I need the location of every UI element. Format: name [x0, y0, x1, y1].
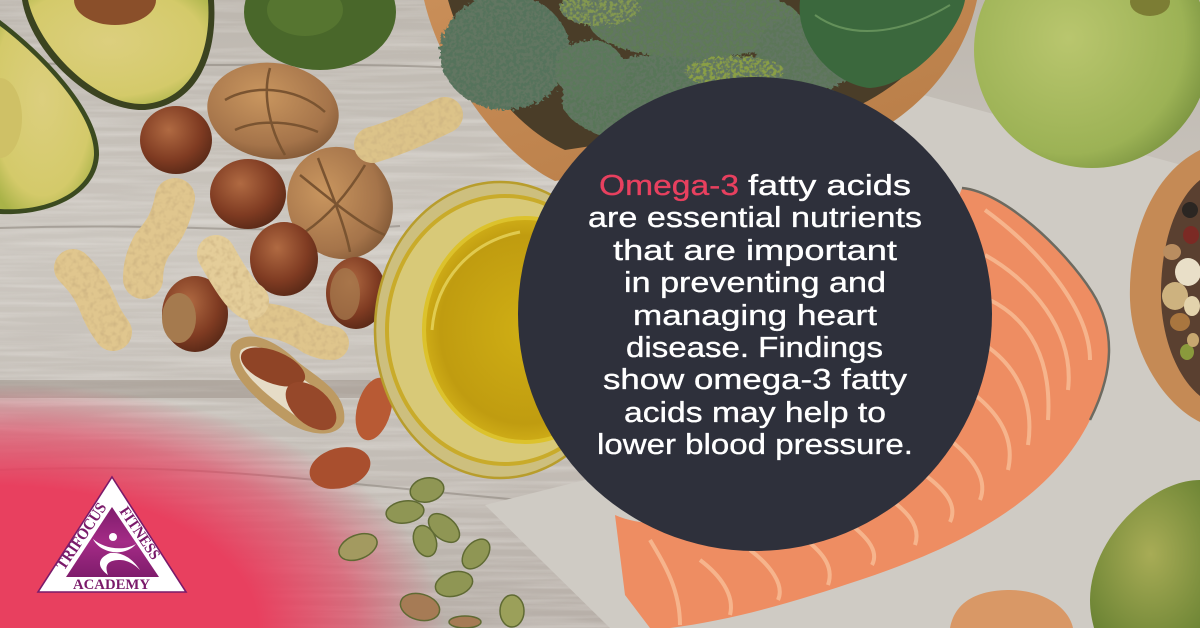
whole avocado: [244, 0, 396, 70]
omega-3 text block: in preventing and: [624, 267, 886, 299]
peanuts: [73, 115, 445, 343]
background: paper sheet: [485, 90, 1200, 628]
logo: Trifocus Fitness Academy: TRIFOCUS: [53, 500, 110, 573]
wooden bowl of greens: [424, 0, 977, 181]
walnuts: [201, 54, 411, 277]
omega-3 text block: disease. Findings: [626, 332, 883, 364]
dark circle panel: [518, 77, 992, 551]
omega-3 text block: that are important: [613, 235, 897, 267]
omega-3 text block: fatty acids: [748, 170, 911, 202]
hazelnuts: [140, 106, 386, 352]
green apple: [974, 0, 1200, 168]
salmon steak: [615, 188, 1109, 628]
omega-3 text block: [588, 170, 922, 461]
omega-3 text block: lower blood pressure.: [597, 429, 913, 461]
glass bowl of olive oil: [375, 182, 626, 478]
omega-3 text block: managing heart: [633, 300, 877, 332]
broccoli: [440, 0, 855, 146]
egg: [950, 590, 1073, 628]
logo: Trifocus Fitness Academy: ACADEMY: [73, 577, 150, 593]
pear: [1090, 480, 1200, 628]
wooden bowl of beans: [1130, 150, 1200, 422]
almonds: [305, 374, 399, 495]
pumpkin seeds: [335, 475, 524, 628]
avocado half top: [22, 0, 214, 110]
omega-3 text block: show omega-3 fatty: [603, 364, 908, 396]
omega-3 text block: acids may help to: [624, 397, 886, 429]
omega-3 text block: Omega-3: [599, 170, 739, 202]
avocado half left: [0, 20, 99, 214]
pink gradient corner: [0, 380, 450, 628]
omega-3 text block: are essential nutrients: [588, 202, 922, 234]
spinach leaf: [800, 0, 965, 88]
logo: Trifocus Fitness Academy: [38, 477, 186, 593]
open peanut shell: [230, 336, 345, 439]
logo: Trifocus Fitness Academy: FITNESS: [116, 504, 163, 563]
